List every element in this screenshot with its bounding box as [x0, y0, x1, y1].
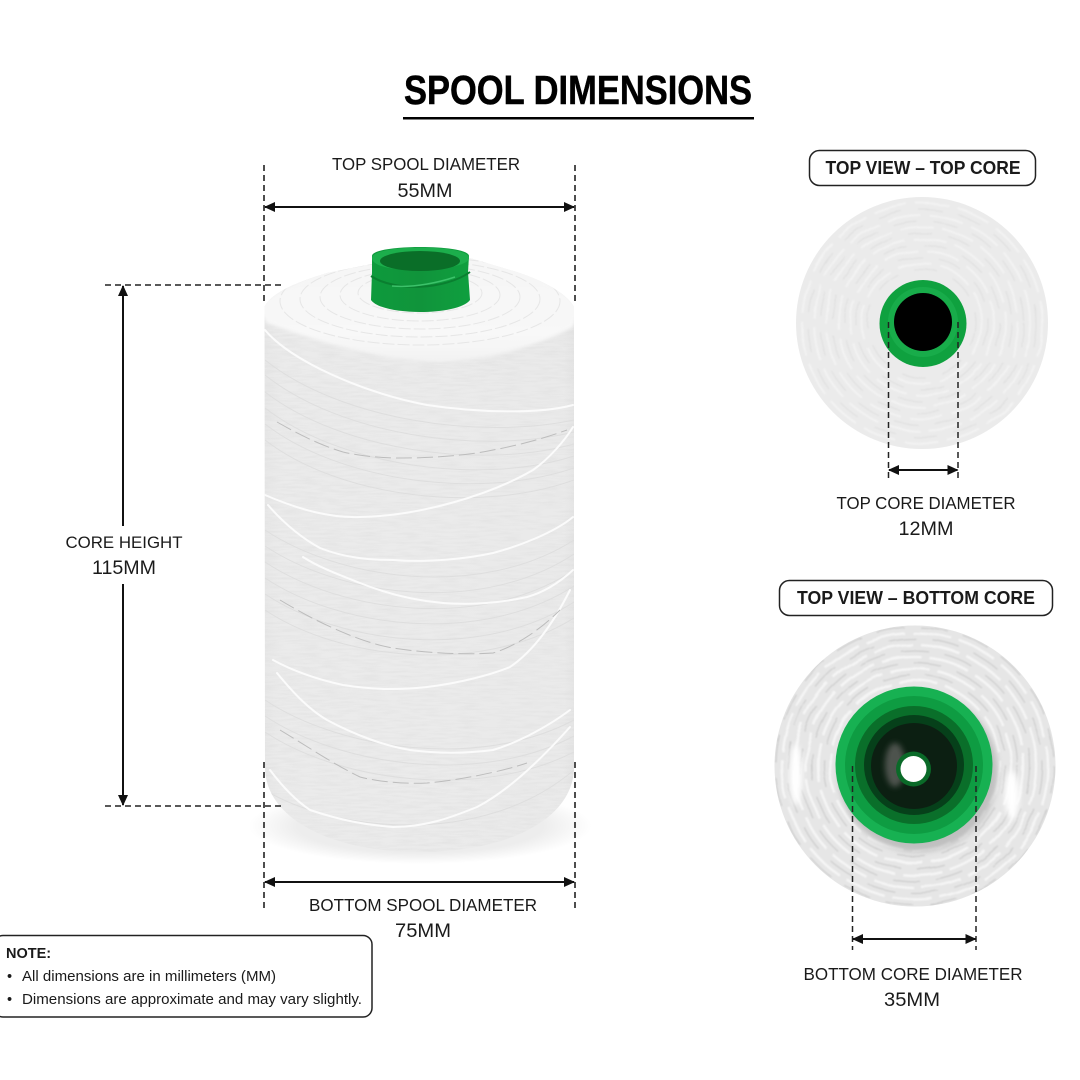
dimension: bottom core diameter: 35MM — [884, 990, 940, 1011]
label: top view bottom core — [780, 580, 1052, 616]
dimension: core height — [66, 285, 281, 806]
label: top view top core: TOP VIEW – TOP CORE — [826, 158, 1020, 178]
dimension: bottom spool diameter: BOTTOM SPOOL DIAMETER — [309, 895, 537, 915]
main spool photo — [264, 247, 574, 859]
note box — [0, 936, 372, 1017]
dimension: bottom spool diameter: 75MM — [395, 921, 451, 942]
dimension: top spool diameter: TOP SPOOL DIAMETER — [332, 154, 520, 174]
note box: Dimensions are approximate and may vary slightly. — [22, 992, 362, 1008]
title: SPOOL DIMENSIONS — [404, 67, 752, 113]
dimension: bottom core diameter: BOTTOM CORE DIAMETER — [804, 964, 1022, 984]
spool floor shadow — [248, 788, 592, 864]
strand lines — [265, 330, 573, 827]
note box: • — [7, 969, 12, 985]
thread highlights — [790, 745, 1019, 819]
bottom view spool photo — [774, 626, 1056, 906]
top core — [880, 280, 966, 367]
dimension: core height: CORE HEIGHT — [66, 533, 182, 552]
spool top shoulder — [258, 254, 580, 362]
dimension: top core diameter — [836, 322, 1016, 540]
label: top view top core — [810, 150, 1036, 186]
dimension: top core diameter: 12MM — [898, 519, 954, 540]
dimension: core height: 115MM — [92, 558, 156, 579]
winding texture — [265, 360, 574, 825]
dimension: top spool diameter — [264, 154, 575, 305]
dimension: top spool diameter: 55MM — [398, 181, 452, 202]
dimension: bottom spool diameter — [264, 762, 575, 942]
top view spool photo — [796, 197, 1048, 449]
note box: All dimensions are in millimeters (MM) — [22, 969, 276, 985]
note box: NOTE: — [6, 946, 51, 962]
dimension: bottom core diameter — [804, 766, 1022, 1011]
green top collar — [371, 247, 470, 312]
bottom core funnel — [838, 692, 998, 852]
label: top view bottom core: TOP VIEW – BOTTOM CORE — [797, 588, 1035, 608]
dimension: top core diameter: TOP CORE DIAMETER — [836, 493, 1016, 513]
spool thread body — [258, 254, 580, 855]
note box: • — [7, 992, 12, 1008]
dark seam lines — [277, 422, 567, 783]
